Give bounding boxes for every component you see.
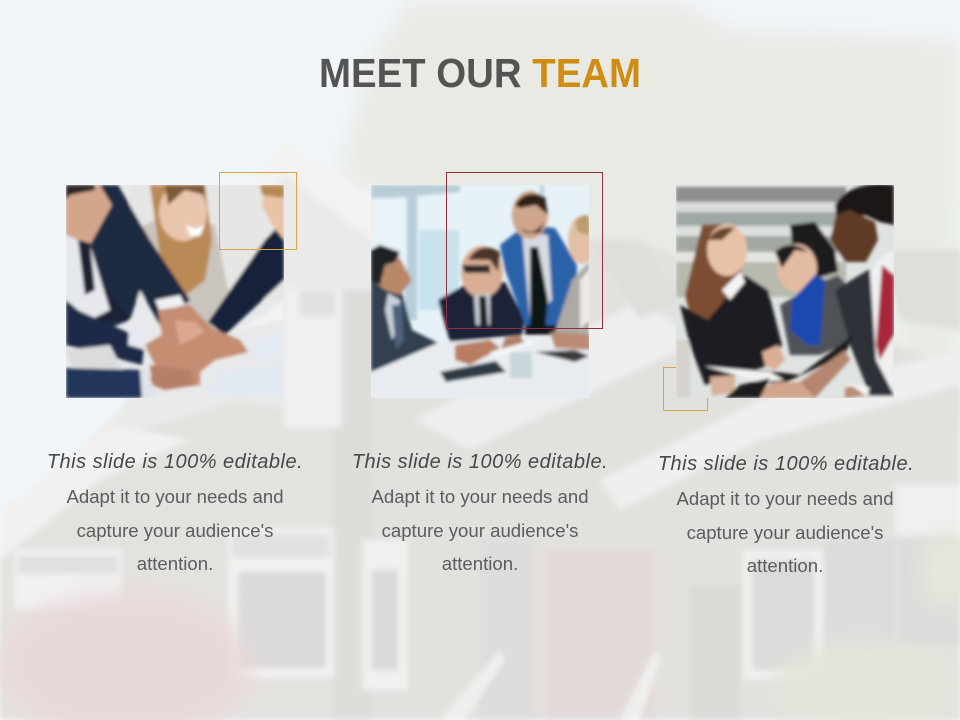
text block: column 2: Adapt it to your needs and (371, 486, 589, 507)
photo: three colleagues reading a folder (676, 184, 894, 398)
text block: column 1 (47, 451, 303, 574)
accent frame: gold, photo 1 (220, 172, 296, 250)
text block: column 2 (352, 451, 608, 574)
text block: column 3 (658, 453, 914, 576)
photo: team stacking hands (66, 183, 285, 398)
title: MEET OUR TEAM (319, 50, 641, 96)
text block: column 2: capture your audience's (382, 520, 578, 541)
accent frame: gold, photo 3 (664, 368, 708, 410)
accent frame: maroon, photo 2 (446, 172, 602, 328)
text block: column 3: This slide is 100% editable. (658, 453, 914, 475)
text block: column 1: This slide is 100% editable. (47, 451, 303, 473)
text block: column 2: attention. (442, 553, 518, 574)
text block: column 1: attention. (137, 553, 213, 574)
text block: column 1: Adapt it to your needs and (66, 486, 284, 507)
text block: column 3: capture your audience's (687, 522, 883, 543)
text block: column 2: This slide is 100% editable. (352, 451, 608, 473)
text block: column 3: Adapt it to your needs and (676, 488, 894, 509)
text block: column 3: attention. (747, 555, 823, 576)
text block: column 1: capture your audience's (77, 520, 273, 541)
photo: meeting at office table (371, 185, 596, 398)
